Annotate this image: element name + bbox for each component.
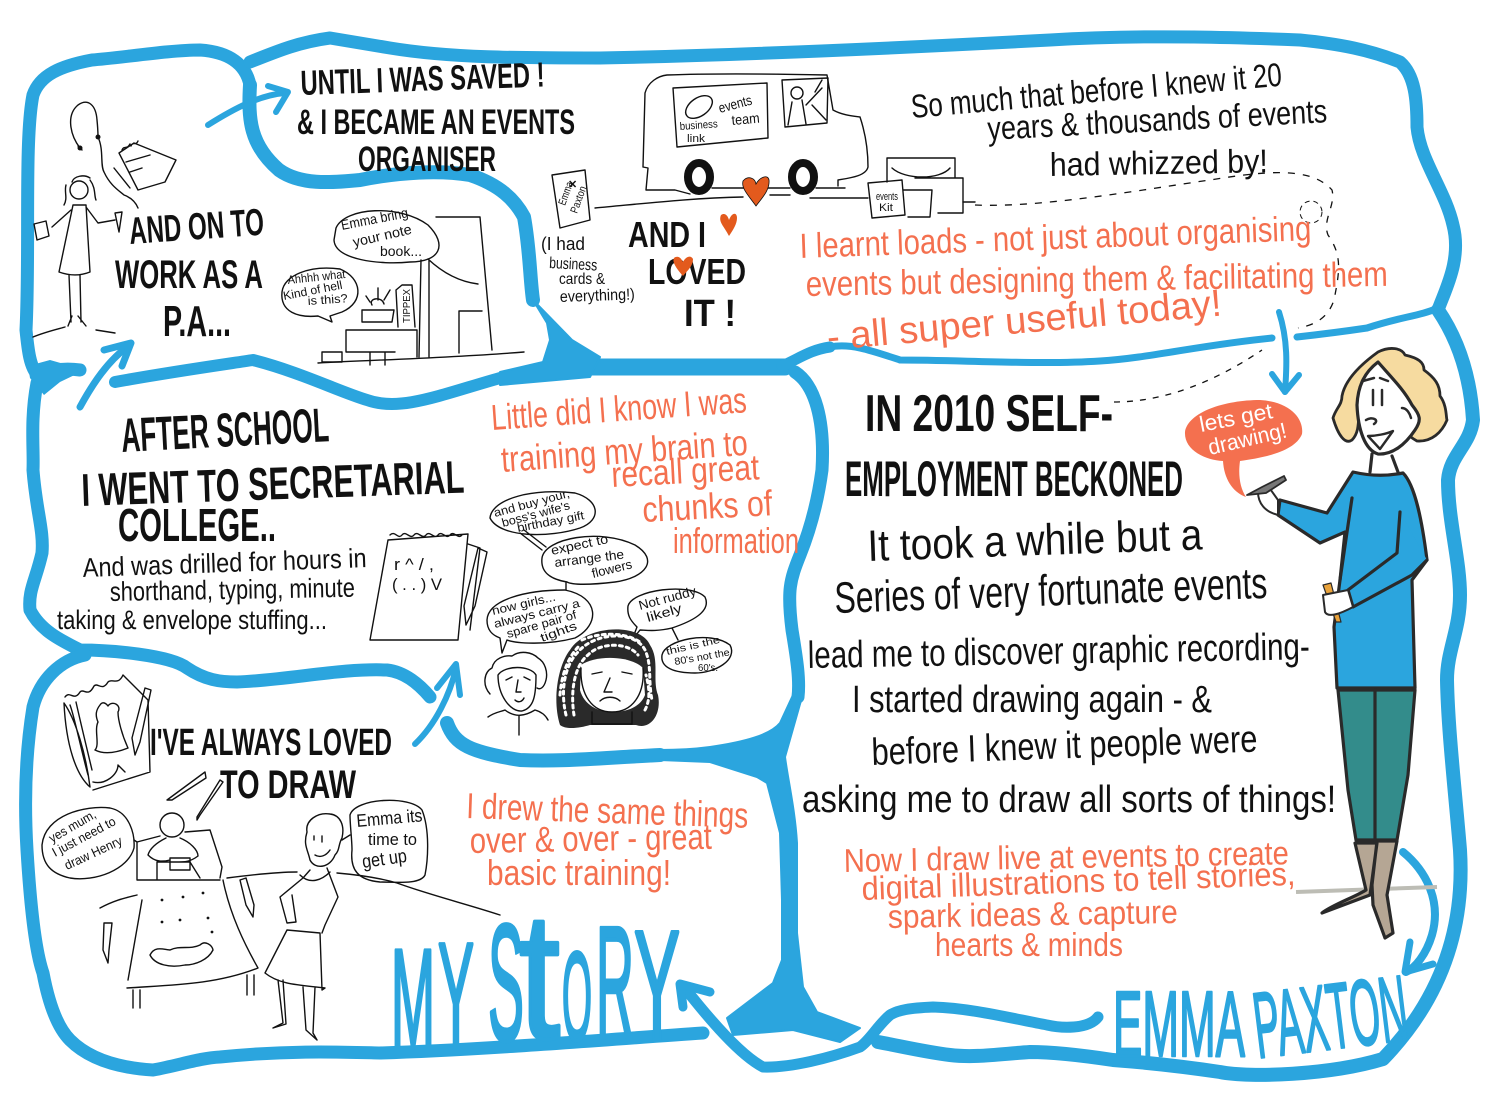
illustration: office with speech bubbles: is this? bbox=[307, 291, 348, 308]
text: drilled for hours: shorthand, typing, minute bbox=[110, 573, 355, 607]
heading: I've always loved to draw bbox=[150, 722, 392, 807]
arrow: curved to Emma Paxton bbox=[1403, 852, 1435, 972]
text: business cards note bbox=[541, 234, 635, 306]
illustration: office with speech bubbles: Ahhhh what bbox=[287, 267, 347, 287]
illustration: stick woman with phone cord and notepad bbox=[33, 102, 176, 337]
text: I learnt loads: events but designing them & facilitating them bbox=[805, 255, 1388, 304]
heading: and on to work as a PA bbox=[115, 202, 265, 346]
heading: and on to work as a PA: WORK AS A bbox=[115, 253, 263, 297]
illustration: speech bubbles and two women: always carry a bbox=[492, 596, 581, 631]
text: Y bbox=[634, 899, 680, 1074]
text: drilled for hours: taking & envelope stuffing... bbox=[57, 605, 327, 635]
text: drilled for hours bbox=[57, 543, 367, 635]
arrow: to events organiser bbox=[208, 86, 288, 125]
text: I drew the same things: I drew the same things bbox=[466, 785, 749, 836]
heading: after school: COLLEGE.. bbox=[118, 499, 276, 551]
illustration: events kit boxes: events bbox=[876, 191, 898, 203]
heading: I've always loved to draw: I'VE ALWAYS LOVED bbox=[150, 722, 392, 764]
illustration: girl drawing in bed with mum: Emma its bbox=[356, 805, 423, 831]
text: now I draw live bbox=[843, 834, 1296, 963]
title: My Story: Y bbox=[438, 913, 474, 1078]
illustration: events van bbox=[595, 74, 868, 208]
text: so much that before I knew it: had whizzed by! bbox=[1049, 142, 1268, 183]
text: I drew the same things: basic training! bbox=[487, 852, 671, 893]
illustration: speech bubbles and two women: arrange the bbox=[554, 547, 625, 570]
illustration: shorthand notebook: ( . . ) V bbox=[392, 575, 443, 594]
text: now I draw live: digital illustrations to tell stories, bbox=[861, 855, 1296, 907]
text: now I draw live: hearts & minds bbox=[935, 926, 1123, 963]
illustration: office with speech bubbles bbox=[282, 204, 524, 365]
text: business cards note: everything!) bbox=[560, 286, 635, 306]
illustration: office with speech bubbles: TIPPEX bbox=[402, 289, 413, 323]
illustration: speech bubbles and two women: birthday gift bbox=[516, 508, 586, 535]
text: I learnt loads: I learnt loads - not just about organising bbox=[799, 209, 1312, 266]
illustration: girl drawing in bed with mum: time to bbox=[368, 830, 417, 849]
illustration: sketchbook and pencils bbox=[64, 675, 254, 963]
text: now I draw live: spark ideas & capture bbox=[887, 893, 1178, 935]
heading: and I loved it: IT ! bbox=[684, 293, 736, 335]
illustration: speech bubbles and two women: this is the bbox=[665, 635, 722, 658]
heading: and I loved it bbox=[628, 214, 746, 335]
text: so much that before I knew it bbox=[909, 56, 1328, 183]
heading: and on to work as a PA: P.A... bbox=[163, 297, 231, 346]
heading: until I was saved: & I BECAME AN EVENTS bbox=[297, 103, 575, 142]
character: Emma with pen bbox=[1247, 348, 1447, 938]
illustration: speech bubbles and two women: 60's. bbox=[698, 663, 718, 674]
illustration: shorthand notebook: r ^ / , bbox=[394, 555, 434, 574]
illustration: speech bubbles and two women: tights bbox=[538, 619, 579, 645]
text: little did I know: training my brain to bbox=[500, 422, 749, 480]
speech bubble: let's get drawing: lets get bbox=[1197, 398, 1275, 437]
illustration: office with speech bubbles: your note bbox=[351, 221, 413, 250]
illustration: speech bubbles and two women: and buy your, bbox=[492, 486, 571, 520]
illustration: office with speech bubbles: Emma bring bbox=[340, 204, 409, 233]
illustration: speech bubbles and two women: 80's not the bbox=[674, 647, 731, 668]
illustration: speech bubbles and two women: Not ruddy bbox=[637, 583, 698, 613]
dashed line: journey to self-employment bbox=[975, 173, 1339, 402]
text: I learnt loads bbox=[799, 209, 1388, 359]
illustration: girl drawing in bed with mum bbox=[42, 800, 500, 1040]
heading: until I was saved: UNTIL I WAS SAVED ! bbox=[300, 56, 545, 103]
text: self-employment story: Series of very fortunate events bbox=[834, 559, 1268, 623]
heading: after school: AFTER SCHOOL bbox=[120, 399, 330, 463]
heading: until I was saved bbox=[297, 56, 575, 179]
illustration: events van: team bbox=[731, 110, 760, 128]
illustration: speech bubbles and two women: flowers bbox=[590, 556, 634, 581]
illustration: events kit boxes bbox=[868, 158, 975, 218]
heading: after school: I WENT TO SECRETARIAL bbox=[81, 451, 465, 516]
text: self-employment story: asking me to draw all sorts of things! bbox=[802, 779, 1336, 821]
title: My Story: S bbox=[488, 891, 524, 1076]
title: My Story: M bbox=[391, 921, 435, 1076]
text: I drew the same things bbox=[466, 785, 749, 893]
text: self-employment story bbox=[802, 510, 1336, 821]
illustration: speech bubbles and two women: expect to bbox=[550, 531, 609, 558]
illustration: business card: ✕ bbox=[568, 179, 577, 191]
illustration: speech bubbles and two women: spare pair of bbox=[505, 607, 579, 641]
speech bubble: let's get drawing: drawing! bbox=[1206, 418, 1289, 460]
illustration: events van: events bbox=[717, 92, 754, 116]
heading: and I loved it: AND I bbox=[628, 214, 706, 255]
text: so much that before I knew it: years & thousands of events bbox=[986, 92, 1328, 147]
title: My Story: R bbox=[596, 893, 634, 1072]
title: Emma Paxton: EMMA bbox=[1113, 972, 1245, 1076]
text: little did I know: Little did I know I was bbox=[490, 379, 748, 438]
illustration: girl drawing in bed with mum: I just need to bbox=[49, 814, 118, 860]
text: self-employment story: before I knew it people were bbox=[871, 719, 1258, 774]
illustration: office with speech bubbles: book... bbox=[380, 243, 422, 259]
text: drilled for hours: And was drilled for hours in bbox=[82, 543, 367, 583]
text: business cards note: cards & bbox=[559, 271, 605, 288]
illustration: business card bbox=[552, 170, 590, 228]
illustration: events van: business bbox=[679, 118, 719, 133]
illustration: girl drawing in bed with mum: yes mum, bbox=[46, 807, 99, 846]
illustration: office with speech bubbles: Kind of hell bbox=[282, 278, 343, 303]
title: My Story: t bbox=[519, 876, 560, 1077]
text: business cards note: business bbox=[549, 255, 598, 275]
heading: until I was saved: ORGANISER bbox=[358, 140, 496, 179]
text: so much that before I knew it: So much that before I knew it 20 bbox=[909, 56, 1283, 125]
heading: in 2010 self-employment beckoned bbox=[845, 385, 1183, 507]
illustration: speech bubbles and two women: boss's wife's bbox=[500, 498, 571, 530]
arrow: from school up to PA bbox=[80, 343, 131, 407]
text: now I draw live: Now I draw live at events to create bbox=[843, 834, 1289, 879]
heading: and on to work as a PA: AND ON TO bbox=[128, 202, 265, 253]
text: self-employment story: I started drawing again - & bbox=[852, 679, 1212, 721]
text: self-employment story: lead me to discover graphic recording- bbox=[807, 626, 1310, 677]
illustration: business card: Emma bbox=[557, 180, 576, 207]
text: I drew the same things: over & over - great bbox=[469, 816, 712, 861]
heading: after school bbox=[81, 399, 465, 551]
title: My Story: O bbox=[562, 928, 592, 1067]
illustration: girl drawing in bed with mum: get up bbox=[361, 846, 408, 873]
ground shadow bbox=[1296, 887, 1437, 892]
title: My Story bbox=[391, 876, 680, 1078]
arrow: down to self-employment bbox=[1272, 312, 1299, 392]
illustration: events kit boxes: Kit bbox=[879, 202, 893, 214]
text: little did I know bbox=[490, 379, 799, 561]
illustration: speech bubbles and two women bbox=[485, 486, 732, 735]
text: I learnt loads: - all super useful today! bbox=[825, 283, 1223, 359]
text: little did I know: information bbox=[673, 520, 799, 561]
speech bubble: let's get drawing bbox=[1185, 398, 1302, 497]
heading: and I loved it: LOVED bbox=[648, 251, 746, 292]
heading: I've always loved to draw: TO DRAW bbox=[220, 763, 356, 807]
heading: in 2010 self-employment beckoned: EMPLOYMENT BECKONED bbox=[845, 451, 1183, 507]
text: business cards note: (I had bbox=[541, 234, 585, 254]
heading: in 2010 self-employment beckoned: IN 2010 SELF- bbox=[865, 385, 1113, 443]
illustration: girl drawing in bed with mum: draw Henry bbox=[62, 833, 125, 873]
illustration: business card: Paxton bbox=[569, 185, 589, 215]
illustration: speech bubbles and two women: now girls... bbox=[491, 590, 557, 618]
illustration: shorthand notebook bbox=[370, 534, 487, 640]
text: little did I know: recall great bbox=[610, 446, 760, 495]
text: self-employment story: It took a while but a bbox=[867, 510, 1204, 571]
text: little did I know: chunks of bbox=[641, 482, 774, 530]
illustration: events van: link bbox=[687, 133, 706, 145]
arrow: from drawing up to school bbox=[415, 664, 460, 744]
illustration: speech bubbles and two women: likely bbox=[645, 600, 684, 625]
arrow: long curve back to My Story bbox=[680, 984, 1098, 1067]
